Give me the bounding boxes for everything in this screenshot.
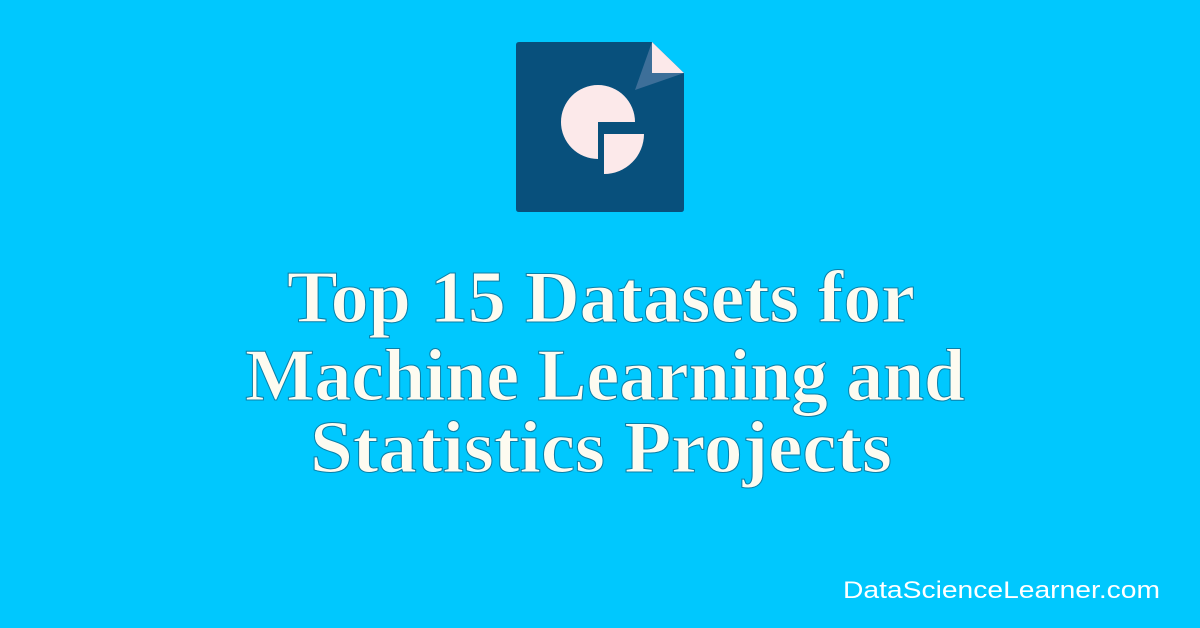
pie large slice bbox=[561, 85, 635, 159]
document body bbox=[516, 42, 684, 212]
title: Statistics Projects bbox=[310, 407, 892, 489]
footer: website: DataScienceLearner.com bbox=[843, 577, 1160, 604]
title: Top 15 Datasets for bbox=[287, 257, 915, 339]
pie small slice bbox=[604, 134, 644, 174]
title: Machine Learning and bbox=[245, 335, 965, 417]
folded corner bbox=[635, 42, 684, 90]
